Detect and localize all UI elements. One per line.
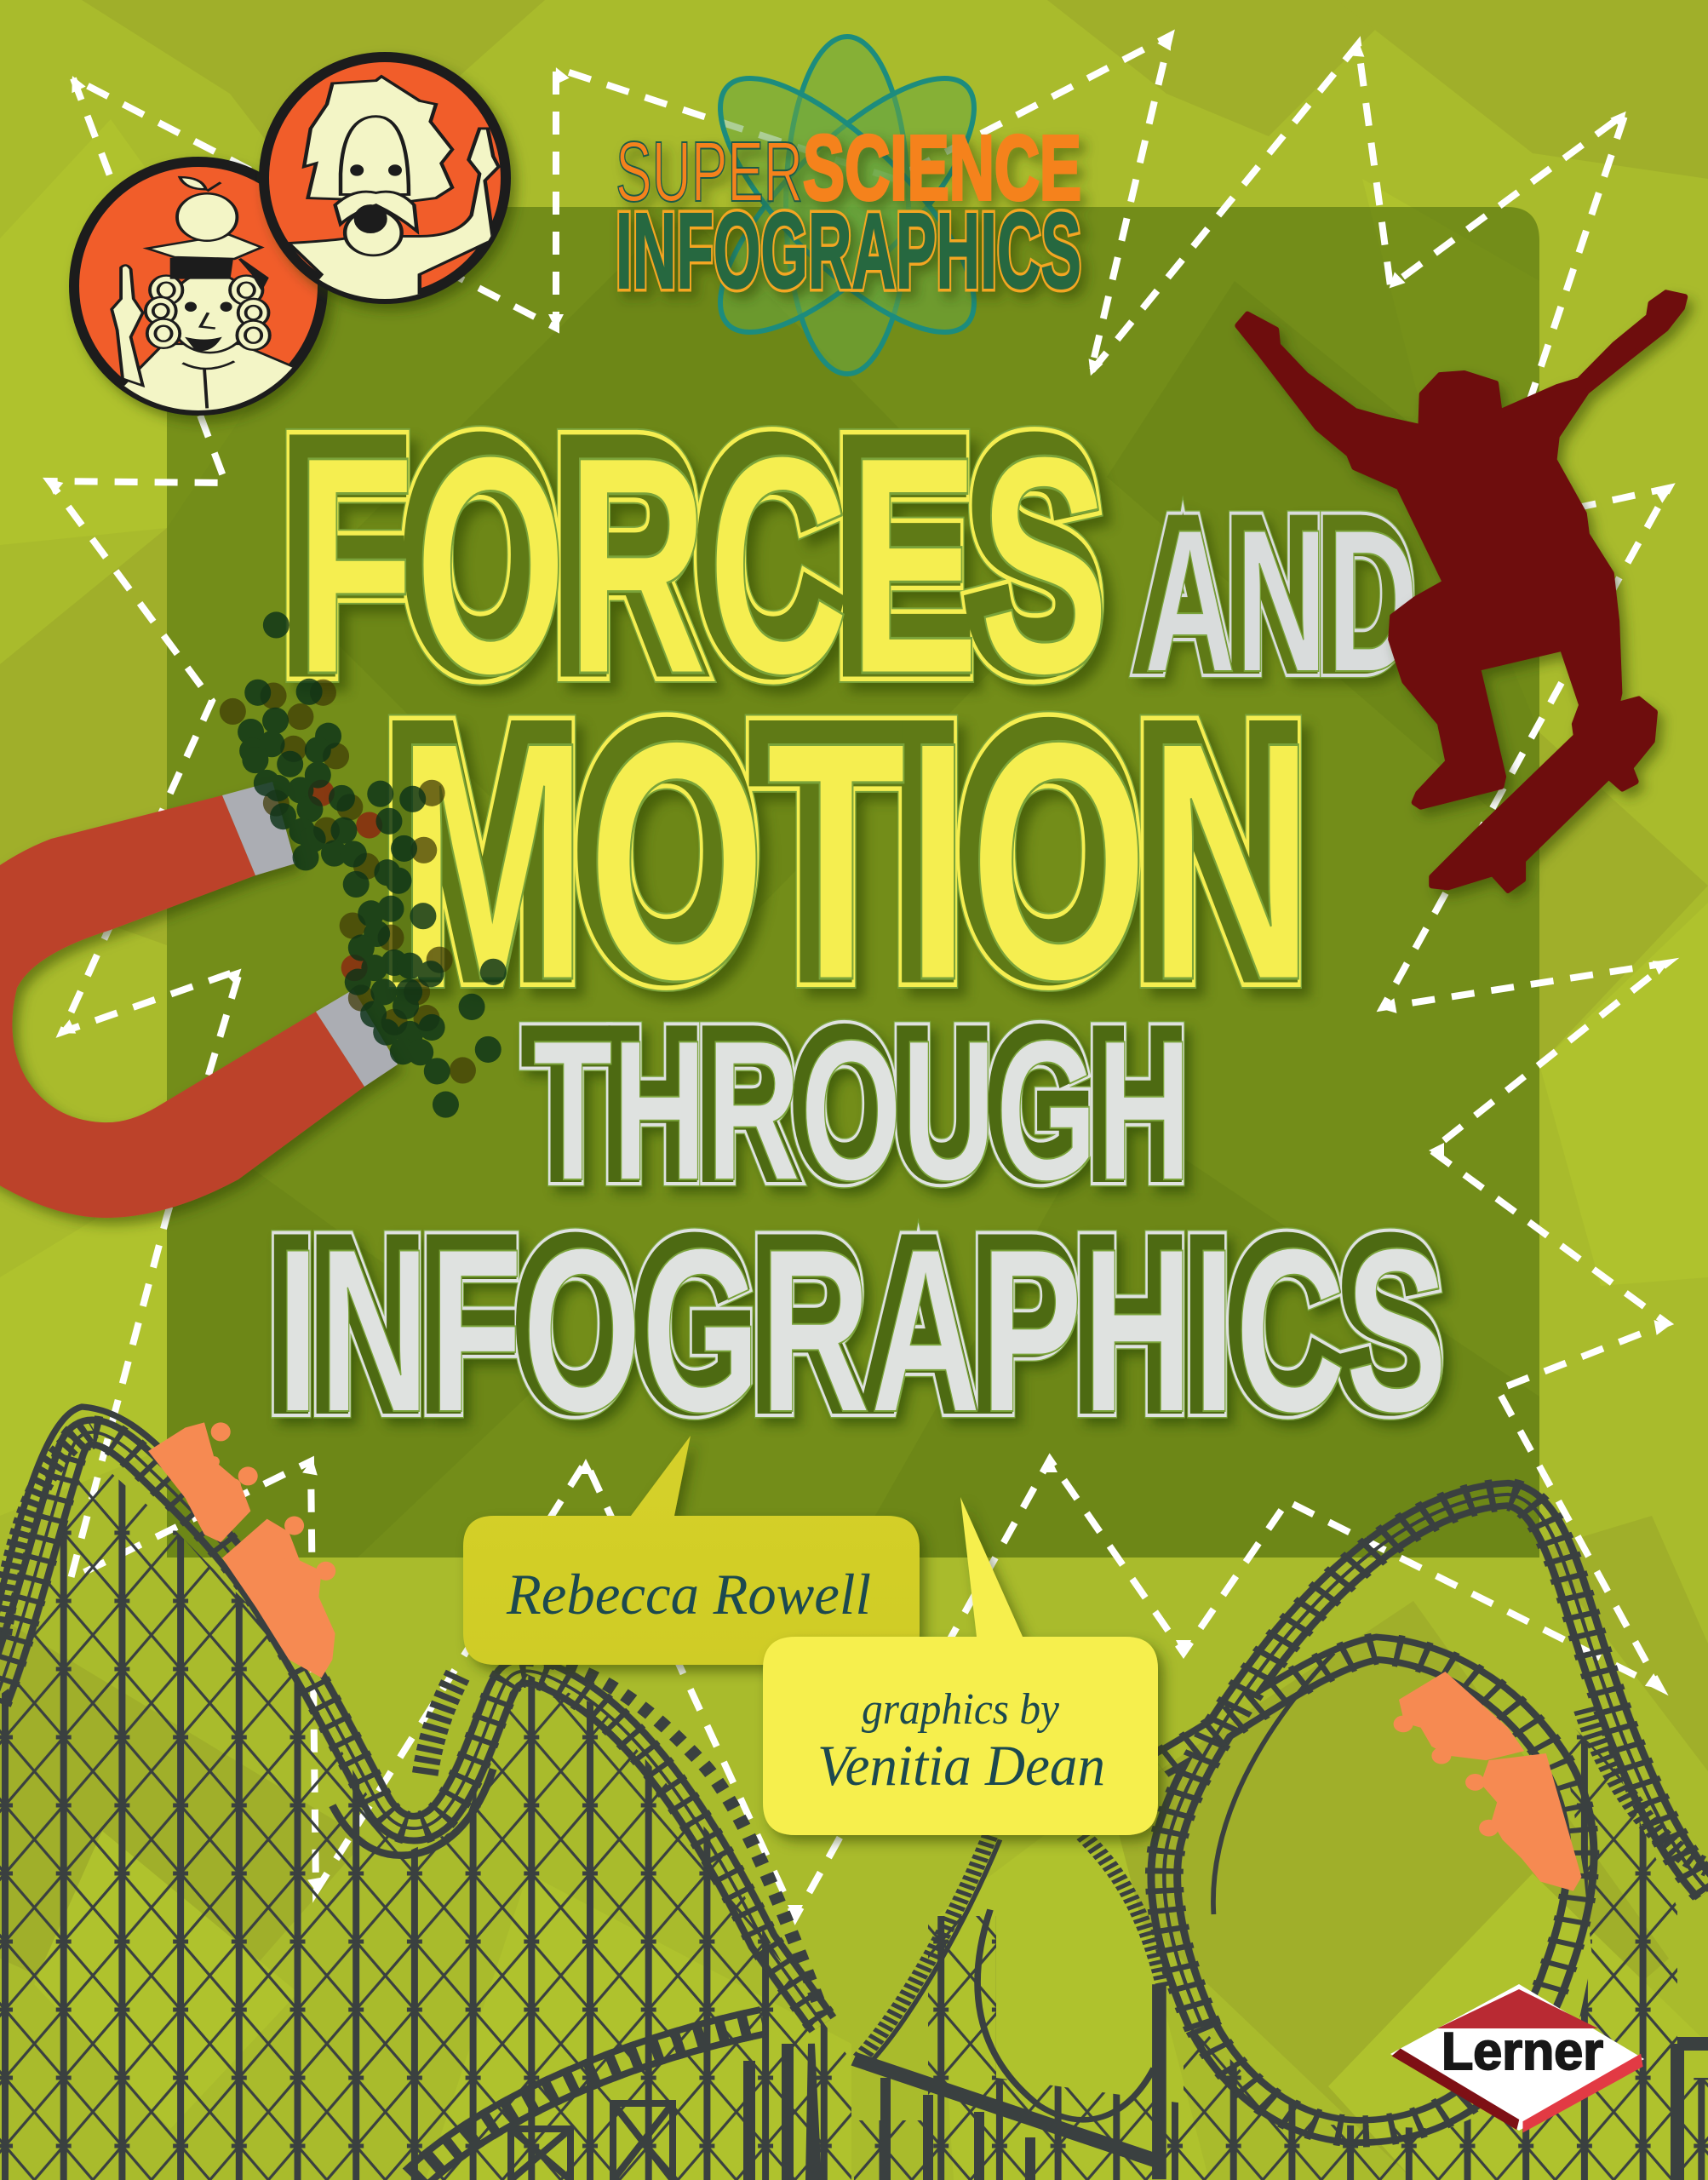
hollow rails	[0, 1432, 1708, 2180]
callout: illustrator: graphics by	[862, 1685, 1060, 1734]
word: Through: THROUGH	[526, 991, 1184, 1215]
left track	[0, 1407, 822, 2014]
skateboarder silhouette	[1238, 293, 1685, 890]
word: Forces: FORCES	[285, 382, 1099, 729]
word: Forces: FORCES	[285, 382, 1099, 729]
logo wordmark: SCIENCE	[803, 116, 1081, 219]
callout: illustrator: Venitia Dean	[817, 1733, 1105, 1798]
medallion: Newton	[74, 162, 323, 417]
word: Motion: MOTION	[387, 661, 1304, 1041]
dark green panel	[167, 207, 1539, 1558]
track ties	[0, 1432, 1708, 2180]
title: Forces and Motion Through Infographics	[270, 382, 1447, 1462]
medallion: Einstein	[264, 57, 506, 306]
word: and: AND	[1138, 480, 1412, 708]
callout: author: Rebecca Rowell	[506, 1562, 871, 1626]
callout: illustrator	[763, 1497, 1158, 1835]
word: Motion: MOTION	[387, 661, 1304, 1041]
word: and: AND	[1138, 480, 1412, 708]
word: Through: THROUGH	[533, 998, 1191, 1222]
callout: author	[463, 1436, 920, 1665]
word: Through: THROUGH	[526, 991, 1184, 1215]
word: Forces: FORCES	[295, 393, 1109, 739]
publisher logo: Lerner: Lerner	[1441, 2022, 1603, 2081]
left cars	[148, 1422, 335, 1678]
word: and	[1138, 480, 1419, 715]
word: Through: THROUGH	[533, 999, 1191, 1223]
word: and: AND	[1144, 488, 1419, 715]
roller coaster	[0, 1362, 1708, 2180]
lower trusses	[511, 2044, 1708, 2180]
lattice supports	[0, 1362, 1708, 2180]
right cars	[1394, 1672, 1581, 1891]
publisher logo: Lerner	[1390, 1984, 1644, 2131]
horseshoe magnet	[0, 782, 398, 1218]
coaster cars	[148, 1422, 1581, 1891]
word: Motion	[387, 661, 1314, 1051]
icon: atom	[685, 37, 1010, 374]
word: and: AND	[1144, 487, 1419, 714]
iron filings	[220, 611, 507, 1118]
word: Forces: FORCES	[285, 382, 1099, 729]
series logo: Super Science Infographics	[616, 37, 1081, 374]
word: Through: THROUGH	[526, 991, 1184, 1215]
logo wordmark	[616, 116, 1081, 311]
logo wordmark: INFOGRAPHICS	[616, 191, 1081, 311]
word: Forces	[285, 382, 1109, 739]
word: Through	[526, 991, 1191, 1223]
logo wordmark: INFOGRAPHICS	[616, 191, 1081, 311]
logo wordmark: SUPER	[616, 124, 803, 220]
word: Motion: MOTION	[387, 661, 1304, 1041]
word: and: AND	[1138, 480, 1412, 708]
word: Forces: FORCES	[295, 393, 1109, 739]
